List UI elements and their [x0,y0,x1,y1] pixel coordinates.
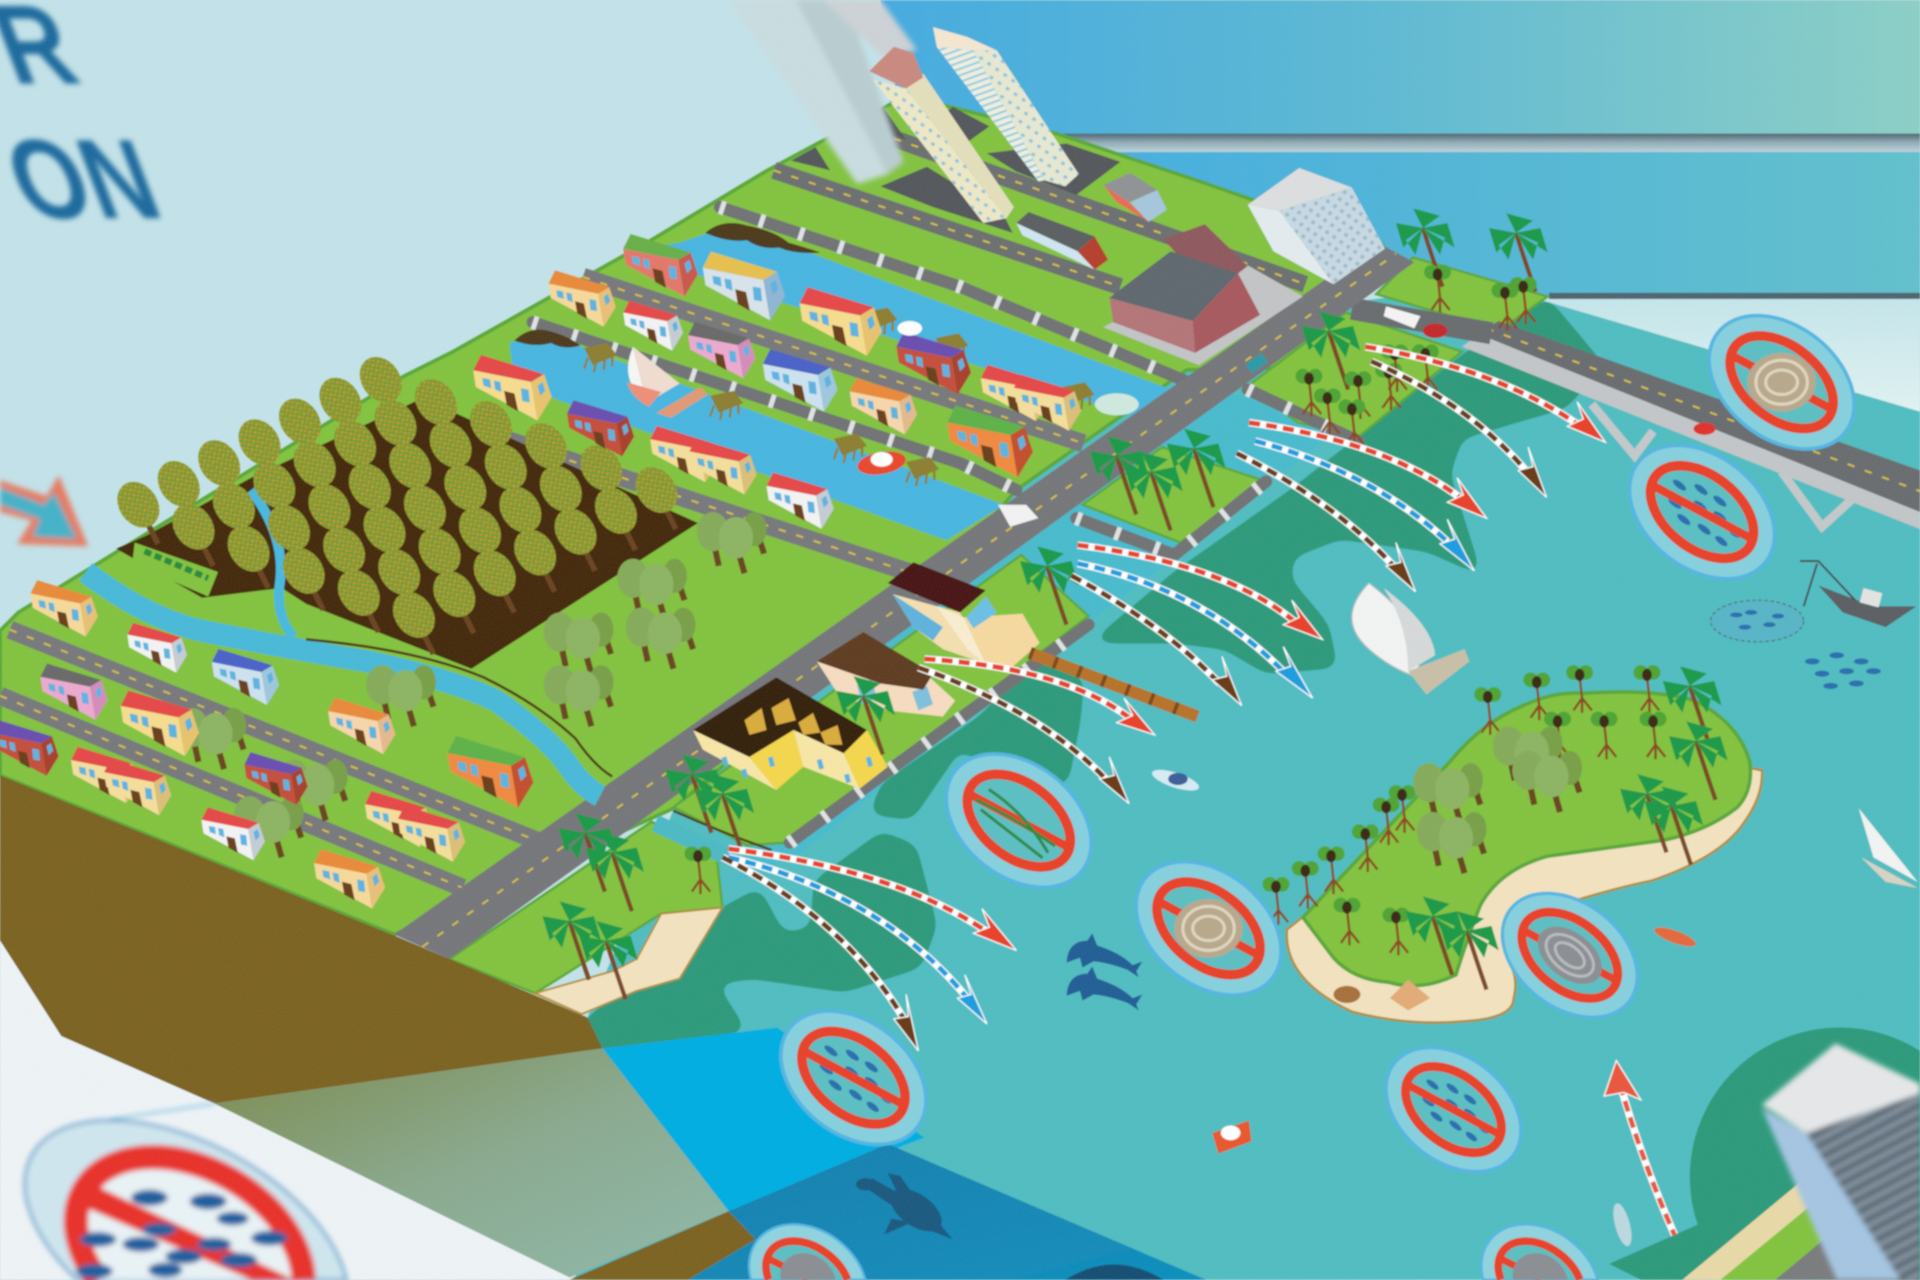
island hut and barrel [1333,980,1430,1010]
brick pad [1103,260,1303,365]
island mangroves [1262,665,1667,955]
mangroves on shore [684,265,1537,894]
grey glass tower [729,0,904,184]
block with beach [449,822,722,993]
pier [1030,653,1198,717]
sailboat white [1352,583,1469,694]
blue arrow at left margin [0,475,88,546]
big sign fish [76,1190,288,1279]
fish school [1805,652,1881,689]
field tree clusters [176,512,767,857]
ban sign: oyster top right [1683,288,1880,476]
fishing trawler and net [1711,561,1916,642]
ban sign: fish source of lens [755,984,952,1172]
bay water [576,284,1920,1280]
dolphin lower [1067,966,1142,1010]
arrow group: upper outfall [1237,423,1487,592]
ban sign: oyster centre [1110,834,1307,1023]
canal water near shore [735,392,1347,882]
corner shop [1103,173,1167,222]
dark whale silhouette [1065,1264,1163,1280]
seawalls [533,207,1358,843]
seagrass plume: lower [582,832,937,1053]
big sign halo [25,1120,346,1280]
big ban sign: fish [25,1103,346,1280]
houses: upper canal row [0,234,1081,909]
cream tower [869,47,1014,223]
long shop [1016,212,1108,270]
horizon band [1053,134,1920,152]
big sign inner disc [76,1157,304,1280]
waterfront estate: glass-front house [888,562,1040,669]
crop rows [144,551,208,578]
pale pink tower [823,0,917,57]
waterfront estate: brown-roof house [817,632,955,717]
bottom-right dark plume [1690,1028,1920,1280]
island palms [1406,666,1728,990]
ban sign: fish lower middle [1362,1022,1545,1197]
palms [542,208,1548,999]
pale lower panel [1531,298,1920,417]
arrow group: bridge outfall [1365,347,1605,497]
lens rim line [110,1103,216,1119]
main avenue [394,243,1414,959]
brown soil cross-section [0,775,602,1103]
bridge supports [1592,404,1851,527]
turtle [856,1173,953,1240]
canal oil stains [514,223,820,347]
stream [251,490,294,637]
return arrow [1604,1061,1684,1255]
island sand [1287,735,1762,1023]
seagrass plume: middle [869,655,1084,819]
second row [549,270,616,327]
lower-left blocks [31,580,98,636]
island trees [1413,726,1582,873]
mainland green surface [0,96,1382,934]
arrow group: estate outfall [918,659,1155,803]
orchard trees [109,349,686,654]
lens cone over land [214,1048,729,1277]
river [86,572,600,796]
partial heading text [0,0,176,242]
lower stream [655,823,729,857]
seagrass plumes [582,298,1604,1053]
foreground office tower [1762,1043,1920,1280]
city parking pads [791,107,1120,233]
canal B [509,333,1004,540]
white office tower [1248,168,1385,284]
arrow group: lower outfall [722,849,1016,1051]
lower soil section [569,1211,756,1280]
block with mangroves [1248,312,1462,437]
beach [535,908,722,1014]
sailboat on canal [627,347,708,418]
second horizon line [1549,293,1920,299]
field patch with crops [132,543,218,597]
white foreground [0,941,588,1280]
small boats [856,321,1698,1248]
sky panel [880,0,1920,137]
lens cone over water [602,1028,924,1211]
arrow group: centre outfall [1071,545,1322,706]
bottom-right shore [1609,1178,1918,1280]
tip block [1376,257,1548,331]
ban sign: seagrass [920,726,1117,915]
block with palms [1082,447,1266,543]
shore blocks [449,257,1548,993]
seagrass plume: upper [1090,298,1604,674]
waterfront estate: yellow house [693,677,888,790]
dolphin upper [1067,933,1142,977]
bridge roadway [1352,309,1920,529]
big sign slash [83,1186,294,1280]
canal A [624,224,1194,423]
island grass [1303,692,1750,986]
pollution arrows [722,347,1605,1051]
lower stream bank [673,811,771,850]
deep water section [688,1144,1206,1280]
orchard soil [116,398,698,669]
foreground blurred details [0,475,1920,1280]
sailboat right edge [1859,808,1918,888]
ban sign: fish under bridge [1604,418,1800,606]
ban sign: oyster deep water [749,1224,865,1280]
cross streets [0,132,1305,888]
striped tower [933,27,1079,186]
brick building [1109,224,1260,353]
river bank [306,639,612,777]
dolphins [1067,933,1142,1010]
ban sign: grey oyster by island [1478,868,1661,1043]
third row [473,355,552,420]
middle blue panel [1053,147,1920,297]
vehicles [998,306,1716,527]
big sign red ring [76,1157,304,1280]
ban sign: oyster bottom right [1481,1224,1598,1280]
canal docks [584,308,1095,486]
blurred towers [729,0,917,184]
block with houses [673,555,1089,845]
